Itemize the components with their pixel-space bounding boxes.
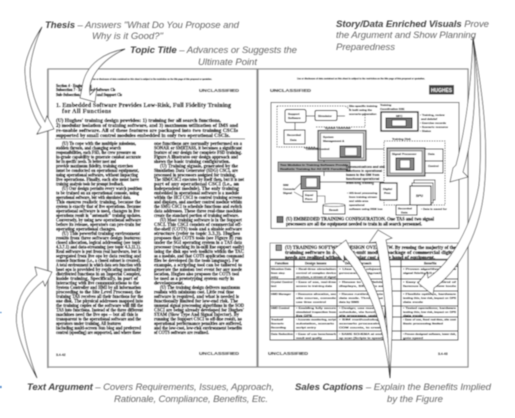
text argument column 2: feature of our design for complete FSD training. [154, 150, 243, 156]
text argument column 2: data addresses. These three real-time modules [154, 208, 242, 214]
text argument column 2: structure (refer to topic 3.3.3). Hughes [154, 230, 240, 237]
classification mark: UNCLASSIFIED [270, 88, 311, 93]
text argument column 2: proposes that COTS tools (see Figure B) run [154, 234, 242, 242]
label: text argument [27, 382, 274, 405]
box: system controller: System Controller [325, 126, 352, 130]
text argument column 2: example, a scripting tool can be tailored to [154, 262, 242, 268]
text argument column 1: (U) To cope with the multiple missions, [62, 140, 137, 147]
thesis paragraph: (U) Hughes' training design provides: 1) training for all search functions, [56, 117, 222, 124]
callout: communications: team-long training [346, 181, 374, 185]
thesis paragraph [55, 117, 245, 139]
text argument column 2: the-shelf (COTS) tools and a sizable software [154, 226, 243, 232]
text argument column 1: provide maximum fidelity, training exercises [56, 164, 133, 170]
label: story/data enriched visuals: Preparedness [336, 42, 395, 53]
text argument column 2: (U) The training design delivers maximum [160, 284, 240, 291]
label: story/data enriched visuals: the Argument and Show Planning [336, 30, 477, 41]
table body: signal fidelity, 1/3 object [403, 271, 443, 275]
table body: data mode [403, 300, 423, 304]
table body: site course, console [296, 296, 336, 300]
table header [275, 262, 437, 266]
arrow: text argument to columns [16, 267, 52, 378]
thesis paragraph: 2) modular isolation of training software, and 3) maximum utilization of IMS and [56, 122, 238, 129]
text argument column 1: training TAS receives all their functions for the [56, 294, 144, 300]
text argument column 2: processed in processors assigned for training. [154, 172, 237, 178]
table body: data mode. Throughput [339, 296, 383, 300]
banner: modules [278, 162, 350, 172]
table caption: (U) TRAINING SOFTWARE DESIGN OVERVIEW. By reusing the majority of the [285, 246, 456, 251]
note: processing: • HIS-level processing [347, 191, 377, 195]
text argument column 2: and the low-cost, low-risk environment benefits [154, 326, 242, 332]
note: training features: • Training, review [420, 113, 445, 117]
classification mark footer: UNCLASSIFIED [268, 351, 308, 356]
text argument column 1: one disk. The physical addresses mapped into [56, 298, 143, 304]
box: training coordinator console [381, 112, 418, 131]
text argument column 1 [56, 140, 144, 336]
text argument column 1: including multi-screen Sun blog and preferred [56, 326, 141, 332]
label: thesis: Why is it Good?" [92, 31, 164, 42]
table body: • Design; use message [339, 306, 383, 310]
box: processor stack [283, 176, 325, 203]
table body: control of complex device [296, 271, 336, 275]
table body: • SIM methodology, [339, 318, 383, 322]
logo: Hughes [429, 85, 454, 94]
section references [56, 84, 123, 97]
arrow: visuals to figure [450, 37, 475, 182]
text argument column 2: one functions are normally performed on a [154, 141, 242, 147]
text argument column 1: operational software, but with simulated data. [56, 195, 131, 201]
table body: data by SIMS [339, 300, 359, 304]
table body: • Reuse runtime effects [339, 292, 383, 296]
table body: • Reuse to SIO fields [339, 280, 383, 284]
table body: • Proven algorithms for low [403, 267, 457, 271]
table body: • Ease of use benchmark [296, 332, 336, 336]
logo: Hughes: HUGHES [431, 88, 452, 94]
table body: • Ease of use, real-time [296, 280, 336, 284]
label: sales captions: by the Figure [387, 394, 443, 405]
text argument column 1: distributed functions in an Imperial Complex, [56, 272, 142, 278]
table header: Design Issues [305, 262, 327, 266]
text argument column 1: system is exactly that of live operations. Because [56, 204, 141, 210]
text argument column 2: (U) Most training software is in the Support [160, 216, 242, 224]
note: processing [347, 191, 383, 211]
box: training disk and signal processor: Training Disk [392, 137, 411, 141]
table: training software design [270, 260, 458, 340]
text argument column 2: software is required, and what is needed is [154, 294, 239, 300]
table caption: needs are realized without particular cost on the hand of equipment. [285, 256, 435, 261]
table body: data mode [403, 314, 423, 318]
box: digital processor [380, 183, 397, 200]
box: training disk and signal processor: Data [428, 152, 435, 156]
text argument column 2: part of any operational CSCI (i.e., an [154, 180, 239, 188]
page header note: Use or disclosure of data contained on this sheet is subject to the restriction on the title page of this proposal or quotation. [297, 78, 425, 80]
text argument column 2: SONAR or SMRTASS, it becomes a significant [154, 146, 242, 152]
note: training features: • Status [420, 129, 431, 133]
table body: live OPS [296, 314, 312, 318]
text argument column 2: shows the basic training configuration. [154, 159, 231, 165]
table body: • Flexible options, hardware [403, 292, 456, 296]
table body: access to training data [296, 284, 332, 288]
table body: Data Reduction [271, 332, 293, 336]
text argument column 1: System Controller and HMI by all information [56, 285, 141, 291]
box: processor stack: Signal [283, 191, 292, 195]
text argument column 2: CSCI. This CSCI consists of commercial off- [154, 222, 242, 228]
text argument column 1: A total environment in which data sets function with [56, 262, 141, 268]
callout: communications: Communications and sim [346, 165, 385, 169]
label: thesis [45, 20, 240, 42]
text argument column 1: control (spoofing) are supported, and where these [56, 329, 141, 336]
table body: testing this, low risk, impact on OPS [403, 296, 456, 300]
table body: test [271, 284, 276, 288]
classification mark: UNCLASSIFIED [199, 88, 239, 93]
note: training features [420, 113, 448, 133]
text argument column 1: results from three software design features: [56, 236, 141, 242]
box: recorded data [284, 130, 305, 144]
table body: HMD Control [271, 306, 289, 310]
table body: COM counts, to create [339, 326, 383, 330]
topic title text: 1. Embedded Software Provides Low-Risk, Full Fidelity Training [56, 103, 231, 109]
text argument column 1: proceeding to the Site Level Processor, the [56, 290, 142, 296]
text argument column 1: Real software is put from real hardware, but is [56, 249, 141, 255]
box: training disk and signal processor: Control [428, 164, 439, 168]
table body: use time control [296, 300, 326, 304]
text argument column 2: within the HCI CSCI to control training screens [154, 195, 242, 201]
box: processor stack: SIM [283, 183, 289, 187]
box: recorded data: Data [290, 138, 297, 142]
text argument column 2: running the Support CSCI to off-line result, no [154, 316, 242, 322]
callout: communications: functions in operational [346, 169, 382, 173]
text argument column 1: operating operational changes. [56, 226, 117, 232]
table body: testing this, low risk, impact on OPS [403, 310, 456, 314]
text argument column 2: as a module, and that COTS application command [154, 254, 244, 260]
text argument column 1: the training copies of the software will fill the [56, 303, 144, 309]
table body: script entry [296, 326, 316, 330]
label: story/data enriched visuals: Story/Data Enriched Visuals Prove [336, 19, 489, 30]
text argument column 2: SYAM (Slow Type And Signal Injector). By [154, 311, 239, 318]
text argument column 1: for its specific needs. To better meet and [56, 159, 116, 165]
banner: modules: Two Modules in Training Software Provide [280, 163, 348, 167]
text argument column 1: machines need the live ops -- but all this is [56, 312, 138, 318]
note: analysis: • Data is saved for [421, 207, 448, 211]
banner: modules: Realistic Training for All GFS Functions [280, 167, 348, 171]
text argument column 2 [154, 141, 244, 336]
table body [271, 267, 457, 340]
box: result database [323, 204, 345, 214]
text argument column 1: 4.3.7.1) and data-streaming (see topic 4.3.11.1). [56, 244, 142, 250]
figure caption: (U) EMBEDDED TRAINING CONFIGURATION. One TAS and two signal [286, 218, 435, 222]
note: site-specific training: Coordination SSE [380, 107, 405, 111]
arrow: sales captions to table caption [333, 240, 390, 378]
text argument column 2: independent module). The only training [154, 185, 239, 192]
box: recorded data: Recorded [287, 133, 301, 137]
text argument column 1: in-grade capability to generate combat accurate [56, 154, 142, 160]
text argument column 2: using the disk ops web toolkits within the TAC [154, 249, 244, 255]
text argument column 2: location. Hughes also proposes the COTS tool [154, 272, 239, 278]
box: signal processing unit stack: SPU [416, 194, 424, 198]
text argument column 1: live operations. Finally, each site must have [56, 177, 140, 183]
note: site-specific training: Training [380, 103, 391, 107]
text argument column 2: generate the mission test event for any mode [154, 267, 243, 273]
text argument column 2: unusual signal processing algorithms in the SOD [154, 303, 244, 309]
note: processing: operational [349, 203, 365, 207]
section references: Subsection 7 - Embedded Software Cls [56, 88, 116, 92]
topic title text [56, 103, 231, 115]
text argument column 2: operational performance penalties are suffered, [154, 321, 243, 327]
note: site-specific training: scenario-generation [349, 112, 377, 116]
table header: Design Approach [345, 262, 371, 266]
text argument column 1: to be trained on an operational console, using [56, 190, 139, 196]
table caption: training software in a new test-unit mode, a package of commercial digital [285, 251, 457, 256]
table body: substation, scenario [296, 322, 334, 326]
box: processor stack: Prem [305, 197, 313, 201]
arrow: sales captions to figure caption [369, 230, 392, 378]
table body: Basic processing limited [403, 322, 443, 326]
section references: Section 4 - Engineering [56, 84, 92, 88]
figure: embedded training configuration diagram [271, 102, 459, 228]
box: simulator [315, 110, 337, 120]
text argument column 2: realism with minimum cost. Little real time [154, 290, 235, 296]
label: topic title: Topic Title – Advances or Suggests the [130, 45, 297, 56]
text argument column 1: operations result in "automatic" training updates. [56, 213, 142, 219]
box: simulator: Simulator [318, 114, 333, 118]
text argument column 1: operators under training. All features [56, 321, 121, 327]
table body: • Resource allocation, use [296, 292, 336, 296]
note: site-specific training [347, 103, 405, 116]
text argument column 2: be used as a prototyping system early in [154, 276, 234, 282]
box: processor stack: Console [283, 187, 295, 191]
text argument column 1: closed allocation, logical addressing (see topic [56, 239, 142, 246]
table body: scenario processing, [339, 322, 383, 326]
text argument column 1: inside training. Specifically, in part of [56, 276, 138, 282]
box: training disk and signal processor [384, 137, 445, 205]
box: signal processing unit stack [410, 180, 435, 205]
text argument column 2: (U) Training signals, generated by the [160, 162, 239, 170]
label: sales captions [295, 382, 492, 405]
label: topic title [130, 45, 297, 68]
text argument column 1: This ensures realistic training, because the [56, 200, 142, 206]
text argument column 2: embedded in operational software is a module [154, 190, 240, 196]
table body: Crystal Control [271, 280, 293, 284]
table body: up scan (Scripts to speed) [339, 336, 383, 340]
table body: displays, SIO tools as [339, 284, 383, 288]
table body: • Enabling fully secure [296, 306, 336, 310]
table body: result and quality [296, 336, 322, 340]
label: topic title: Ultimate Point [198, 57, 257, 68]
box: training disk and signal processor: Signal Processor [392, 152, 417, 156]
table body: Situation Data [271, 267, 291, 271]
page header note: Use or disclosure of data contained on this sheet is subject to the restriction on the title page of this proposal or quotation. [92, 78, 212, 81]
note: processing: software using RSM bus [349, 207, 383, 211]
text argument column 1: TAS into functions. Instead of the three different [56, 308, 143, 314]
page number: 3.4-43 [438, 352, 448, 356]
table body: simulated inspection from [296, 310, 336, 314]
table header: Function [275, 262, 289, 266]
table body: Scenario [271, 322, 284, 326]
table body: • Real-time simulation [296, 267, 336, 271]
box: support software: Support [288, 112, 300, 116]
note: site-specific training: • Site-specific training [347, 104, 377, 108]
text argument column 2: of COTS software are realized. [154, 330, 210, 336]
table body: • SAME SCHEMA at end, [339, 332, 383, 336]
text argument column 1: console functions (i.e., a closed subnet is created). [56, 257, 142, 264]
table body: goto speed [403, 336, 423, 340]
table body: processor signals [339, 271, 384, 275]
box: training coordinator console: MFC [396, 114, 403, 118]
table body: from step [271, 271, 285, 275]
panel: left proposal page [47, 69, 257, 368]
table body: site processes, updates [339, 314, 383, 318]
box: support software: Software [288, 116, 301, 120]
figure caption: processors are all the equipment needed to train in all search personnel. [286, 222, 422, 228]
text argument column 2: create the standard portion of training software. [154, 213, 240, 219]
box: system controller [306, 126, 366, 160]
arrow: thesis to paragraph [25, 27, 54, 134]
thesis paragraph: supported by small control modules embedded in only two operational CSCIs. [56, 133, 231, 139]
box: recorded data 2: Data [401, 210, 408, 214]
text argument column 1: (U) This powerful training environment [62, 230, 140, 237]
label: text argument: Rationale, Compliance, Benefits, Etc. [114, 394, 268, 405]
callout: communications: buses to the SIM from [346, 173, 379, 177]
box: processor stack: Equal [305, 193, 313, 197]
text argument column 2: functionally limited for low-end risk. The [154, 298, 239, 304]
text argument column 2: files be developed (in the tools language). For [154, 257, 240, 264]
text argument column 2: and displays, and another control module within [154, 200, 242, 206]
text argument column 1: (U) Our design permits every watch position [62, 185, 142, 192]
table body: • Easy scenario control of [403, 280, 456, 284]
note: processing: and wide-area [349, 199, 369, 203]
table body: Tracked/ [271, 318, 283, 322]
table body: entry [271, 275, 279, 279]
topic title text: for All Functions [62, 109, 112, 115]
text argument column 1: interacting with live communications to the [56, 280, 140, 286]
box: system controller: Management & [323, 139, 345, 143]
box: result database: Result [329, 208, 338, 212]
label: story/data enriched visuals [336, 19, 489, 53]
box: recorded data 2 [396, 205, 417, 215]
table header: Benefits [424, 262, 437, 266]
section references: Sub-Subsection - Training and Support Cls [56, 93, 123, 97]
text argument column 2: Simulation Data Generator (SDG) CSCI, are [154, 167, 239, 174]
label: text argument: Text Argument – Covers Requirements, Issues, Approach, [27, 382, 274, 393]
arrow: visuals to table [418, 37, 486, 295]
note: processing: from training stream [349, 195, 378, 199]
box: digital processor: Proc [384, 191, 391, 195]
text argument column 1: segregated from live ops by data routing and [56, 254, 141, 260]
text argument column 2: Figure A illustrates our design approach and [154, 154, 238, 160]
table body: • Use SOD object- [339, 267, 383, 271]
text argument column 2: under the SGI operating system in a TAS data [154, 240, 242, 246]
text argument column 2: development. [154, 280, 185, 286]
note: training features: • Exercise records [420, 121, 446, 125]
text argument column 1: responsibilities, each FSD, the crew pressure on [56, 150, 136, 156]
table body: • Tested operations; hardware [403, 306, 456, 310]
table body: • Ease of use, fixed real-time, site cost [403, 318, 456, 322]
text argument column 1: before its release, operators can pre-train for [56, 222, 142, 228]
callout: communications: functional operational [346, 177, 379, 181]
text argument column 1: host ops is provided by replicating mutually [56, 267, 141, 273]
table body: famous use; no new tools [403, 284, 456, 288]
note: site-specific training: is built using the [349, 108, 372, 112]
table body: Recording [271, 326, 286, 330]
note: training features: and debrief [421, 117, 437, 121]
page number: 3.4-42 [56, 353, 66, 357]
table body: • Proven designed software, lower risk, [403, 332, 456, 336]
box: system controller: Console Control [306, 147, 329, 151]
callout: communications [346, 165, 385, 185]
table body: schedule, via functions [339, 310, 383, 314]
table body: HMD Manager [271, 292, 292, 296]
label: sales captions: Sales Captions – Explain the Benefits Implied [295, 382, 492, 393]
text argument column 1: Conversely, by using new operational software [56, 218, 142, 224]
arrow: topic title to heading [80, 49, 125, 102]
text argument column 2: The SIM/CSCI executes by itself then, but it is not [154, 177, 244, 183]
label: thesis: Thesis – Answers "What Do You Propose and [45, 20, 240, 31]
box: recorded data 2: Recorded [398, 206, 412, 210]
figure caption [277, 216, 435, 228]
box: support software [285, 110, 306, 122]
table body: structure, a stream of signal [296, 275, 336, 279]
text argument column 1: training analysis tools for prompt feedback. [56, 182, 124, 188]
text argument column 1: operational software is used, changes in live [56, 208, 141, 214]
text argument column 1: transparent to the operational software and the [56, 316, 142, 322]
table body: • Accurate monitoring, script [296, 318, 336, 322]
box: digital processor: Digital [383, 187, 392, 191]
text argument column 2: the SMG CSCI to schedule functions and switch [154, 204, 242, 210]
text argument column 2: CSCI are being already developed for Hughes' [154, 308, 244, 314]
note: training features: • Scenario resource [420, 125, 448, 129]
box: system controller: System [323, 135, 334, 139]
text argument column 1: sudden threats, and changing search [56, 146, 121, 152]
text argument column 1: must be conducted on operational equipment, [56, 168, 140, 174]
table caption [270, 243, 459, 261]
classification mark footer: UNCLASSIFIED [199, 351, 239, 356]
marginal blue marks [0, 312, 2, 388]
text argument column 2: processor (reaching its in-mill line support easily) [154, 244, 244, 250]
text argument column 1: using operational software, without impacting [56, 172, 138, 178]
thesis paragraph: re-usable software. All of these features are packaged into two training CSCIs [56, 128, 238, 134]
